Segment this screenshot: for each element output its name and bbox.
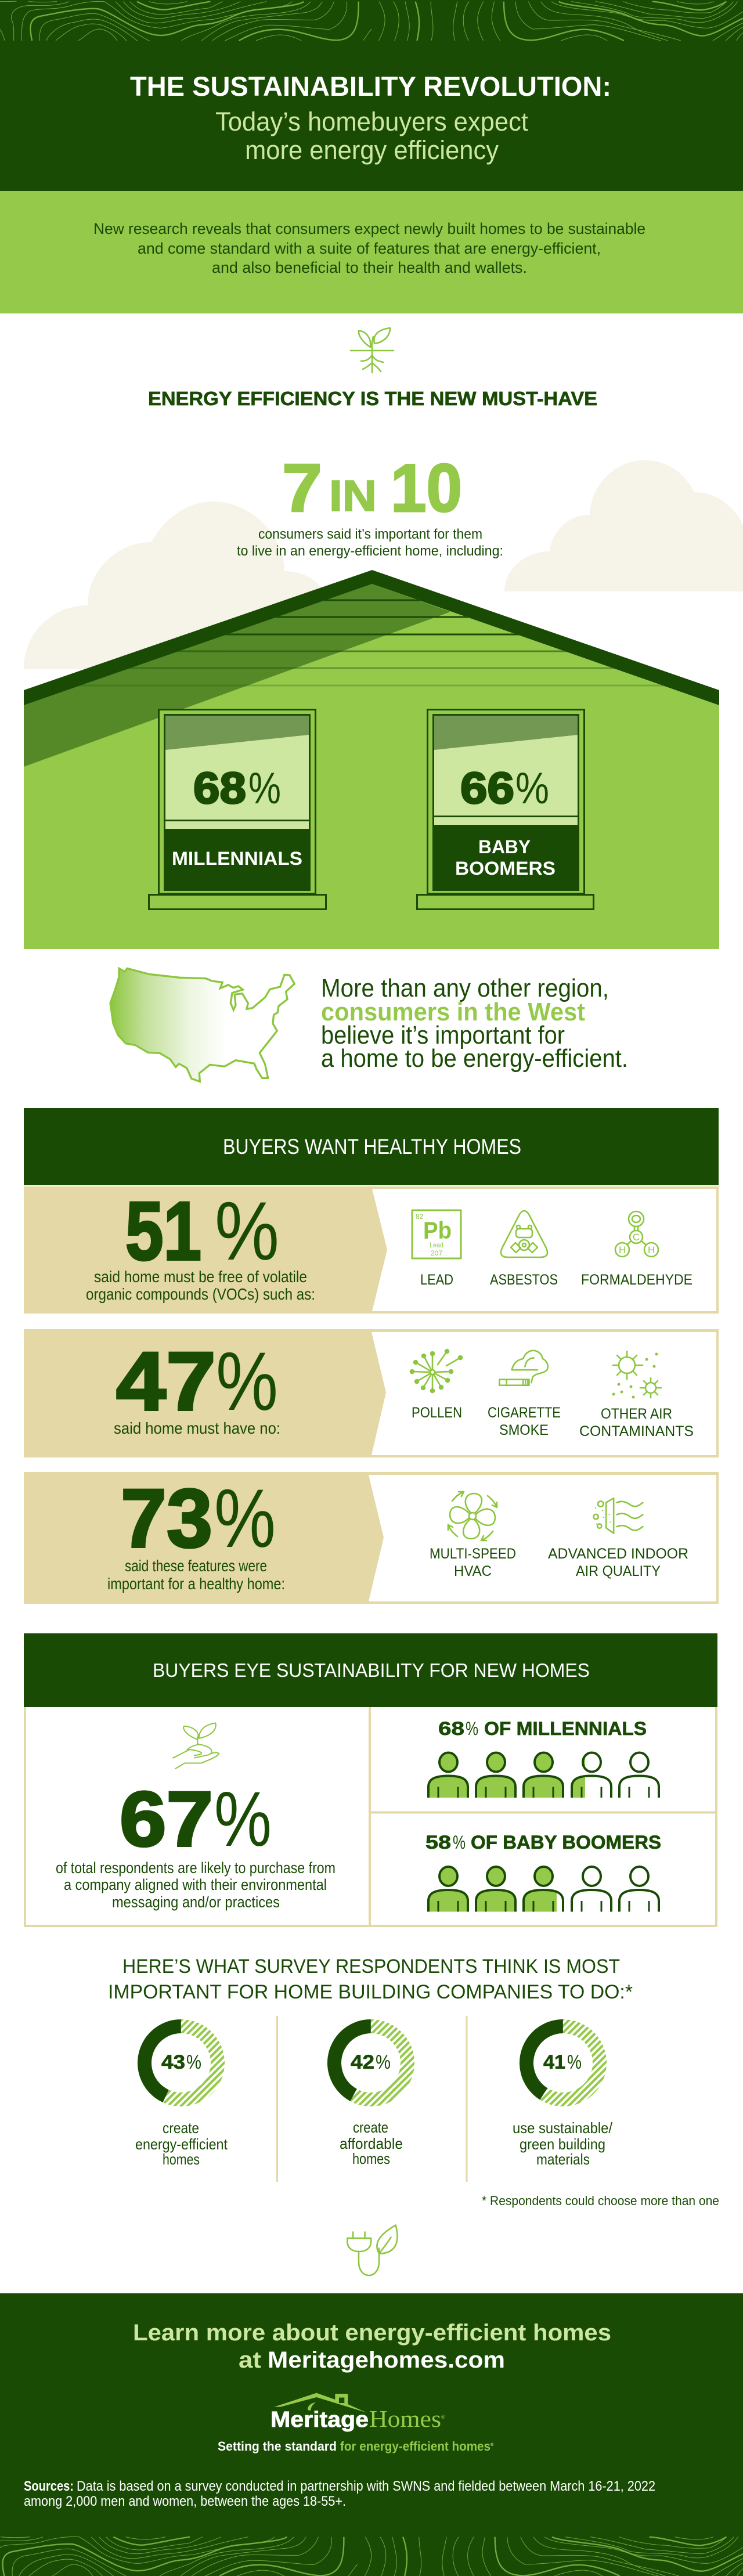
clouds bbox=[24, 460, 743, 669]
donut: 41 percent: % bbox=[567, 2051, 582, 2073]
banner: buyers eye sustainability: BUYERS EYE SUSTAINABILITY FOR NEW HOMES bbox=[153, 1659, 590, 1681]
stat caption: to live in an energy-efficient home, including: bbox=[237, 543, 503, 559]
label: use sustainable green building materials: materials bbox=[536, 2151, 590, 2168]
window: millennials: 68 bbox=[193, 764, 246, 813]
panel: 47 percent contaminants bbox=[24, 1329, 719, 1457]
call to action: Meritagehomes.com bbox=[268, 2347, 505, 2373]
label: advanced indoor air quality: ADVANCED INDOOR bbox=[548, 1546, 688, 1562]
heading: energy efficiency: ENERGY EFFICIENCY IS THE NEW MUST-HAVE bbox=[148, 388, 597, 409]
icon: formaldehyde molecule: C bbox=[633, 1232, 640, 1243]
label: advanced indoor air quality bbox=[548, 1546, 688, 1579]
west region statement: More than any other region, bbox=[321, 974, 609, 1002]
icon: formaldehyde molecule bbox=[615, 1211, 658, 1257]
sources: among 2,000 men and women, between the ages 18-55+. bbox=[24, 2494, 346, 2509]
heading: 68% of millennials: 68 bbox=[438, 1718, 464, 1739]
icon: air filter bbox=[593, 1498, 643, 1534]
window: baby boomers: % bbox=[515, 764, 549, 813]
donut: 43 percent: % bbox=[186, 2051, 201, 2073]
heading: survey question bbox=[108, 1956, 633, 2003]
stat caption bbox=[56, 1859, 336, 1911]
stat: 51% bbox=[125, 1185, 279, 1278]
stat: 73%: % bbox=[214, 1473, 276, 1565]
sources: Data is based on a survey conducted in partnership with SWNS and fielded between March 16-21, 2022 bbox=[77, 2478, 655, 2494]
window: millennials: % bbox=[248, 764, 281, 813]
panel: 51 percent VOCs bbox=[24, 1185, 719, 1314]
label: use sustainable green building materials: use sustainable/ bbox=[513, 2119, 613, 2137]
stat caption: organic compounds (VOCs) such as: bbox=[86, 1285, 315, 1303]
header band bbox=[0, 0, 743, 191]
label: create energy-efficient homes: energy-efficient bbox=[135, 2135, 228, 2153]
label: create energy-efficient homes bbox=[135, 2119, 228, 2168]
icon: lead element: 207 bbox=[431, 1249, 442, 1257]
title: THE SUSTAINABILITY REVOLUTION: bbox=[130, 71, 611, 102]
big stat: 7 in 10: IN bbox=[329, 471, 377, 520]
label: use sustainable green building materials: green building bbox=[520, 2135, 605, 2153]
label: create affordable homes bbox=[340, 2119, 403, 2167]
call to action: Learn more about energy-efficient homes bbox=[133, 2320, 611, 2346]
donut: 42 percent bbox=[321, 2013, 421, 2113]
big stat: 7 in 10: 7 bbox=[282, 450, 322, 526]
donut: 43 percent: 43 bbox=[161, 2051, 185, 2073]
label: other air contaminants: OTHER AIR bbox=[601, 1406, 672, 1422]
intro band bbox=[0, 191, 743, 313]
heading: 58% of baby boomers: OF BABY BOOMERS bbox=[471, 1832, 661, 1853]
icon: cigarette smoke bbox=[499, 1351, 548, 1386]
intro band: and also beneficial to their health and wallets. bbox=[212, 259, 527, 276]
stat caption bbox=[107, 1557, 285, 1593]
stat caption: consumers said it’s important for them bbox=[258, 526, 482, 542]
logo: Meritage Homes: ® bbox=[441, 2414, 445, 2420]
map of the United States bbox=[110, 968, 294, 1081]
subtitle: more energy efficiency bbox=[245, 135, 499, 165]
label: formaldehyde: FORMALDEHYDE bbox=[581, 1272, 692, 1288]
logo: Meritage Homes: Meritage bbox=[270, 2408, 369, 2432]
west region statement: believe it’s important for bbox=[321, 1021, 565, 1049]
logo: Meritage Homes bbox=[270, 2393, 445, 2432]
west region statement: a home to be energy-efficient. bbox=[321, 1044, 628, 1073]
donut: 41 percent: 41 bbox=[543, 2051, 565, 2073]
tagline: ® bbox=[490, 2442, 494, 2447]
stat caption bbox=[86, 1268, 315, 1303]
heading: 68% of millennials: % bbox=[466, 1718, 478, 1739]
donut: 42 percent: 42 bbox=[351, 2051, 374, 2073]
heading: 58% of baby boomers: 58 bbox=[425, 1832, 451, 1853]
window: millennials bbox=[149, 709, 326, 909]
label: create affordable homes: homes bbox=[352, 2150, 390, 2167]
panel: 73 percent features bbox=[24, 1472, 719, 1604]
subtitle bbox=[215, 107, 528, 165]
stat caption: messaging and/or practices bbox=[112, 1893, 280, 1911]
stat: 67%: % bbox=[214, 1776, 272, 1863]
icon: formaldehyde molecule: H bbox=[619, 1244, 626, 1255]
icon: asbestos gas mask bbox=[501, 1211, 547, 1257]
window: baby boomers: BABY bbox=[478, 836, 531, 857]
heading: survey question: HERE’S WHAT SURVEY RESPONDENTS THINK IS MOST bbox=[122, 1956, 620, 1978]
icon: lead element: 82 bbox=[416, 1213, 423, 1221]
window: baby boomers: BOOMERS bbox=[455, 858, 556, 879]
label: cigarette smoke: SMOKE bbox=[499, 1422, 549, 1438]
icon: pollen bbox=[410, 1350, 462, 1392]
label: cigarette smoke: CIGARETTE bbox=[488, 1405, 561, 1421]
label: create energy-efficient homes: homes bbox=[163, 2151, 200, 2168]
heading: 68% of millennials: OF MILLENNIALS bbox=[484, 1718, 647, 1739]
banner: buyers want healthy homes bbox=[24, 1108, 719, 1185]
icon: formaldehyde molecule: H bbox=[648, 1244, 655, 1255]
heading: 58% of baby boomers: % bbox=[453, 1832, 466, 1853]
label: create affordable homes: affordable bbox=[340, 2135, 403, 2152]
window: millennials: MILLENNIALS bbox=[172, 848, 302, 869]
footnote: * Respondents could choose more than one bbox=[482, 2193, 719, 2208]
tagline bbox=[218, 2439, 494, 2454]
banner: buyers want healthy homes: BUYERS WANT HEALTHY HOMES bbox=[223, 1135, 521, 1159]
call to action: at bbox=[239, 2347, 261, 2373]
window: baby boomers: 66 bbox=[460, 764, 514, 813]
label: other air contaminants: CONTAMINANTS bbox=[579, 1423, 694, 1439]
label: multi-speed hvac: HVAC bbox=[454, 1563, 492, 1579]
panel: sustainability stats bbox=[25, 1707, 716, 1926]
icon: multi-speed fan bbox=[448, 1492, 497, 1540]
stat caption: said these features were bbox=[125, 1557, 267, 1575]
window: baby boomers bbox=[417, 709, 593, 909]
icon: plant with roots bbox=[351, 328, 394, 373]
label: create affordable homes: create bbox=[353, 2119, 388, 2136]
label: advanced indoor air quality: AIR QUALITY bbox=[576, 1563, 661, 1579]
label: other air contaminants bbox=[579, 1406, 694, 1439]
intro band: and come standard with a suite of features that are energy-efficient, bbox=[138, 240, 601, 257]
stat caption: important for a healthy home: bbox=[107, 1575, 285, 1593]
banner: buyers eye sustainability bbox=[24, 1633, 717, 1707]
heading: survey question: IMPORTANT FOR HOME BUILDING COMPANIES TO DO:* bbox=[108, 1981, 633, 2003]
tagline: Setting the standard bbox=[218, 2439, 337, 2454]
west region statement bbox=[321, 974, 628, 1073]
icon: lead element: Lead bbox=[430, 1241, 443, 1249]
stat caption: said home must have no: bbox=[114, 1419, 280, 1437]
subtitle: Today’s homebuyers expect bbox=[215, 107, 528, 136]
stat caption: a company aligned with their environmental bbox=[64, 1876, 327, 1893]
donut: 42 percent: % bbox=[376, 2051, 391, 2073]
big stat: 7 in 10 bbox=[282, 450, 462, 526]
footer band bbox=[0, 2293, 743, 2576]
label: lead: LEAD bbox=[420, 1272, 453, 1288]
label: multi-speed hvac: MULTI-SPEED bbox=[430, 1546, 516, 1562]
big stat: 7 in 10: 10 bbox=[391, 450, 462, 526]
stat: 73% bbox=[121, 1473, 276, 1565]
stat: 67% bbox=[120, 1776, 272, 1863]
icon: plug with leaf bbox=[347, 2225, 397, 2275]
icon: lead element: Pb bbox=[423, 1217, 452, 1244]
west region statement: consumers in the West bbox=[321, 998, 585, 1026]
stat caption: of total respondents are likely to purchase from bbox=[56, 1859, 336, 1877]
icon: hand holding plant bbox=[173, 1723, 219, 1769]
sources: Sources: bbox=[24, 2478, 74, 2494]
icon: lead element bbox=[412, 1210, 461, 1258]
house illustration bbox=[24, 570, 719, 949]
icon: other air contaminants bbox=[612, 1351, 661, 1399]
sources bbox=[24, 2478, 655, 2509]
label: create energy-efficient homes: create bbox=[163, 2119, 199, 2137]
stat: 47%: % bbox=[216, 1336, 278, 1428]
intro band: New research reveals that consumers expect newly built homes to be sustainable bbox=[93, 220, 645, 237]
stat caption: said home must be free of volatile bbox=[94, 1268, 307, 1286]
stat: 47% bbox=[116, 1336, 278, 1428]
label: multi-speed hvac bbox=[430, 1546, 516, 1579]
stat: 51%: % bbox=[215, 1185, 279, 1278]
tagline: for energy-efficient homes bbox=[340, 2439, 490, 2454]
logo: Meritage Homes: Homes bbox=[369, 2405, 441, 2432]
label: pollen: POLLEN bbox=[412, 1405, 462, 1421]
stat: 51%: 51 bbox=[125, 1185, 201, 1278]
donut: 43 percent bbox=[132, 2014, 230, 2112]
label: asbestos: ASBESTOS bbox=[490, 1272, 558, 1288]
stat caption bbox=[237, 526, 503, 559]
label: use sustainable green building materials bbox=[513, 2119, 613, 2168]
call to action bbox=[133, 2320, 611, 2373]
pictogram: millennials bbox=[428, 1753, 659, 1798]
label: cigarette smoke bbox=[488, 1405, 561, 1438]
donut: 41 percent bbox=[513, 2012, 614, 2113]
stat: 67%: 67 bbox=[120, 1776, 213, 1863]
pictogram: baby boomers bbox=[428, 1867, 659, 1912]
stat: 47%: 47 bbox=[116, 1336, 216, 1428]
stat: 73%: 73 bbox=[121, 1473, 212, 1565]
